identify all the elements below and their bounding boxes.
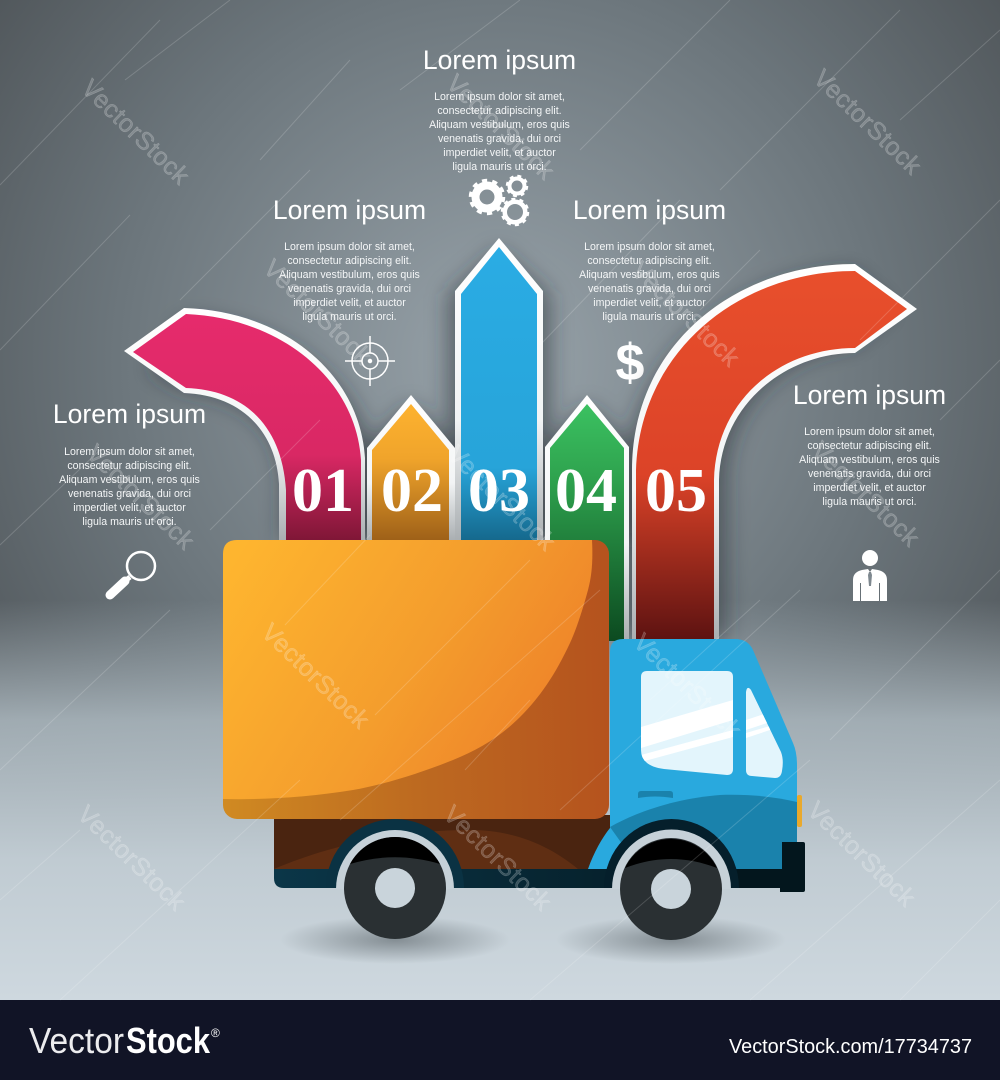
truck cab — [588, 639, 802, 869]
watermarks: VectorStock — [441, 69, 560, 186]
text block 04: Lorem ipsum dolor sit amet, — [584, 241, 715, 253]
text block 02: Lorem ipsum dolor sit amet, — [284, 241, 415, 253]
arrow 05 — [632, 264, 917, 641]
text block 01: Lorem ipsum dolor sit amet, — [64, 446, 195, 458]
text block 01: Aliquam vestibulum, eros quis — [59, 474, 200, 486]
number 03: 03 — [468, 457, 530, 525]
text block 05: venenatis gravida, dui orci — [808, 468, 931, 480]
text block 05: Aliquam vestibulum, eros quis — [799, 454, 940, 466]
footer logo — [29, 1020, 220, 1061]
text block 01: ligula mauris ut orci. — [82, 516, 177, 528]
floor shadow under front wheel — [556, 916, 786, 964]
text block 05 — [793, 380, 946, 508]
icon: gears — [470, 176, 528, 225]
cab front window — [641, 671, 733, 775]
number 01: 01 — [292, 457, 354, 525]
icon: person in suit — [853, 550, 887, 601]
number 04: 04 — [555, 457, 617, 525]
text block 03: ligula mauris ut orci. — [452, 161, 547, 173]
number 05: 05 — [645, 457, 707, 525]
text block 05: Lorem ipsum — [793, 380, 946, 410]
text block 01 — [53, 399, 206, 528]
text block 03: Aliquam vestibulum, eros quis — [429, 119, 570, 131]
watermarks: VectorStock — [76, 74, 195, 191]
watermarks: VectorStock — [72, 800, 191, 917]
arrow 04 — [545, 395, 629, 641]
watermarks: VectorStock — [258, 254, 377, 371]
watermarks: VectorStock — [808, 64, 927, 181]
text block 01: venenatis gravida, dui orci — [68, 488, 191, 500]
icon: target — [345, 336, 395, 386]
text block 03: Lorem ipsum — [423, 45, 576, 75]
cab side window — [746, 688, 783, 778]
footer logo: ® — [211, 1026, 220, 1040]
watermarks: VectorStock — [806, 436, 925, 553]
delivery truck — [223, 540, 805, 940]
text block 02: Aliquam vestibulum, eros quis — [279, 269, 420, 281]
text block 03: consectetur adipiscing elit. — [437, 105, 562, 117]
text block 03: Lorem ipsum dolor sit amet, — [434, 91, 565, 103]
text block 04: venenatis gravida, dui orci — [588, 283, 711, 295]
text block 05: consectetur adipiscing elit. — [807, 440, 932, 452]
watermarks: VectorStock — [802, 796, 921, 913]
text block 05: imperdiet velit, et auctor — [813, 482, 926, 494]
text block 03: imperdiet velit, et auctor — [443, 147, 556, 159]
footer logo: Vector — [29, 1020, 124, 1061]
watermarks — [72, 64, 927, 917]
watermarks: VectorStock — [442, 440, 561, 557]
watermarks: VectorStock — [256, 618, 375, 735]
background floor — [0, 600, 1000, 1000]
text block 04: imperdiet velit, et auctor — [593, 297, 706, 309]
text block 03: venenatis gravida, dui orci — [438, 133, 561, 145]
text block 02: imperdiet velit, et auctor — [293, 297, 406, 309]
text block 05: Lorem ipsum dolor sit amet, — [804, 426, 935, 438]
watermarks: VectorStock — [626, 256, 745, 373]
icon: dollar sign: $ — [616, 334, 645, 392]
number 02: 02 — [381, 457, 443, 525]
footer image id: VectorStock.com/17734737 — [729, 1036, 972, 1058]
watermarks: VectorStock — [628, 628, 747, 745]
front wheel — [604, 819, 739, 940]
text block 04: Lorem ipsum — [573, 195, 726, 225]
text block 02: ligula mauris ut orci. — [302, 311, 397, 323]
truck bumper — [730, 842, 805, 892]
text block 01: imperdiet velit, et auctor — [73, 502, 186, 514]
footer logo: Stock — [126, 1020, 211, 1061]
arrow 01 — [124, 308, 365, 541]
icon: magnifier — [110, 552, 155, 595]
text block 04: consectetur adipiscing elit. — [587, 255, 712, 267]
text block 02: Lorem ipsum — [273, 195, 426, 225]
text block 01: consectetur adipiscing elit. — [67, 460, 192, 472]
text block 04: ligula mauris ut orci. — [602, 311, 697, 323]
floor shadow under rear wheel — [280, 916, 510, 964]
watermarks: VectorStock — [81, 439, 200, 556]
text block 02: venenatis gravida, dui orci — [288, 283, 411, 295]
text block 04 — [573, 195, 726, 323]
rear wheel — [326, 819, 464, 939]
arrow 03 — [455, 238, 543, 541]
text block 02: consectetur adipiscing elit. — [287, 255, 412, 267]
arrow 02 — [367, 395, 455, 541]
text block 03 — [423, 45, 576, 173]
text block 05: ligula mauris ut orci. — [822, 496, 917, 508]
footer bar — [0, 1000, 1000, 1080]
truck cargo box — [223, 540, 609, 819]
text block 02 — [273, 195, 426, 323]
shadows behind arrows — [150, 250, 890, 640]
watermarks: VectorStock — [438, 800, 557, 917]
truck chassis — [274, 815, 800, 888]
text block 04: Aliquam vestibulum, eros quis — [579, 269, 720, 281]
text block 01: Lorem ipsum — [53, 399, 206, 429]
